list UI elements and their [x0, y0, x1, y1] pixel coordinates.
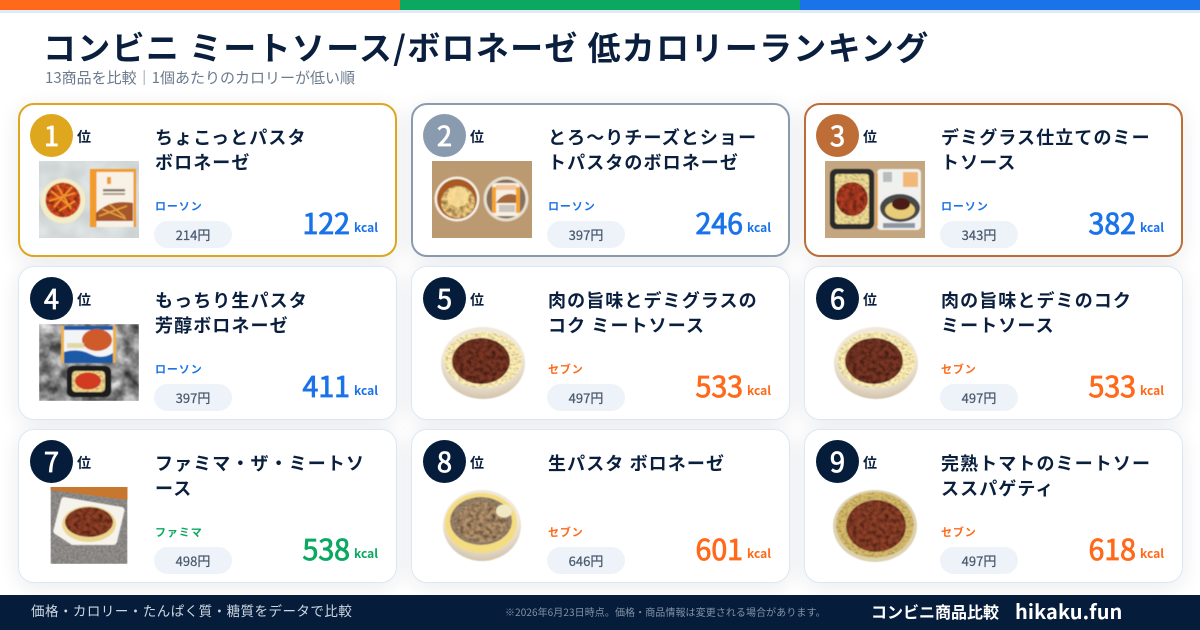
photo: pasta and package: [39, 161, 139, 238]
product name: コク ミートソース: [548, 312, 705, 338]
store: セブン: [941, 361, 977, 377]
card: rank 7: [18, 429, 397, 583]
rank badge 8: 8: [437, 441, 452, 480]
store: セブン: [941, 524, 977, 540]
photo: package and tray on stone: [39, 324, 139, 401]
rank badge 5: [423, 277, 466, 320]
store: ローソン: [941, 198, 989, 214]
price: [547, 547, 625, 574]
price: [547, 384, 625, 411]
card: rank 5: [411, 266, 790, 420]
product name: ミートソース: [941, 312, 1055, 338]
store: セブン: [548, 361, 584, 377]
price: [154, 384, 232, 411]
store: ローソン: [155, 198, 203, 214]
product name: トパスタのボロネーゼ: [548, 149, 739, 175]
price: 343円: [962, 225, 996, 244]
rank suffix: 位: [863, 290, 877, 310]
unit: kcal: [354, 382, 378, 399]
footer tagline: 価格・カロリー・たんぱく質・糖質をデータで比較: [31, 600, 352, 620]
price: 646円: [569, 551, 603, 570]
unit: kcal: [354, 219, 378, 236]
rank suffix: 位: [863, 127, 877, 147]
photo: white tray pasta: [50, 487, 128, 564]
rank badge 9: [816, 440, 859, 483]
product name: 芳醇ボロネーゼ: [155, 312, 289, 338]
price: [547, 221, 625, 248]
footer brand label: コンビニ商品比較: [871, 599, 999, 623]
rank badge 1: [30, 114, 73, 157]
price: 397円: [569, 225, 603, 244]
calories: 382: [1089, 202, 1136, 243]
product name: ボロネーゼ: [155, 149, 250, 175]
product name: [548, 124, 757, 175]
rank suffix: 位: [77, 453, 91, 473]
product name: 肉の旨味とデミグラスの: [548, 287, 758, 313]
price: [940, 221, 1018, 248]
product name: [941, 124, 1151, 175]
rank badge 3: [816, 114, 859, 157]
rank suffix: 位: [470, 453, 484, 473]
rank suffix: 位: [470, 290, 484, 310]
store: ローソン: [155, 361, 203, 377]
rank badge 6: [816, 277, 859, 320]
product name: [548, 287, 758, 338]
calories: 411: [303, 365, 350, 406]
product name: とろ～りチーズとショー: [548, 124, 757, 150]
unit: kcal: [747, 545, 771, 562]
price: [154, 547, 232, 574]
unit: kcal: [1140, 545, 1164, 562]
product name: もっちり生パスタ: [155, 287, 308, 313]
photo: tomato meat sauce plate: [832, 490, 918, 562]
product name: ちょこっとパスタ: [155, 124, 307, 150]
calories: 618: [1089, 528, 1136, 569]
product name: [155, 124, 307, 175]
card: rank 3: [804, 103, 1183, 257]
photo: meat sauce bowl: [440, 326, 526, 400]
rank suffix: 位: [470, 127, 484, 147]
rank badge 9: 9: [830, 441, 845, 480]
card: rank 2: [411, 103, 790, 257]
product name: ース: [155, 475, 192, 501]
price: [940, 384, 1018, 411]
calories: 601: [696, 528, 743, 569]
unit: kcal: [747, 219, 771, 236]
price: [940, 547, 1018, 574]
calories: 122: [303, 202, 350, 243]
product name: デミグラス仕立てのミー: [941, 124, 1151, 150]
calories: 533: [1089, 365, 1136, 406]
product name: [941, 287, 1132, 338]
rank suffix: 位: [77, 127, 91, 147]
rank badge 4: [30, 277, 73, 320]
rank badge 7: [30, 440, 73, 483]
price: 214円: [176, 225, 210, 244]
photo: fresh pasta bowl: [442, 490, 522, 562]
rank badge 6: 6: [830, 278, 845, 317]
card: rank 4: [18, 266, 397, 420]
calories: 246: [696, 202, 743, 243]
top colour bar: [0, 0, 1200, 13]
photo: tray and package: [825, 161, 925, 238]
calories: 538: [303, 528, 350, 569]
product name: 肉の旨味とデミのコク: [941, 287, 1132, 313]
footer bar: [0, 595, 1200, 630]
rank suffix: 位: [863, 453, 877, 473]
unit: kcal: [354, 545, 378, 562]
store: セブン: [548, 524, 584, 540]
price: 397円: [176, 388, 210, 407]
product name: [155, 450, 365, 501]
rank badge 2: [423, 114, 466, 157]
product name: ススパゲティ: [941, 475, 1055, 501]
price: 497円: [962, 388, 996, 407]
subtitle: 13商品を比較｜1個あたりのカロリーが低い順: [45, 67, 355, 88]
price: 497円: [569, 388, 603, 407]
rank badge 4: 4: [44, 278, 59, 317]
title: コンビニ ミートソース/ボロネーゼ 低カロリーランキング: [43, 22, 930, 70]
footer disclaimer: ※2026年6月23日時点。価格・商品情報は変更される場合があります。: [505, 604, 826, 619]
photo: meat sauce bowl: [834, 326, 918, 400]
calories: 533: [696, 365, 743, 406]
store: ファミマ: [155, 524, 203, 540]
unit: kcal: [1140, 382, 1164, 399]
card: rank 8: [411, 429, 790, 583]
product name: [941, 450, 1151, 501]
price: 498円: [176, 551, 210, 570]
price: [154, 221, 232, 248]
photo: cheese gratin pasta: [432, 161, 532, 238]
rank badge 2: 2: [437, 115, 452, 154]
rank badge 3: 3: [830, 115, 845, 154]
product name: 完熟トマトのミートソー: [941, 450, 1151, 476]
card: rank 9: [804, 429, 1183, 583]
footer site name: hikaku.fun: [1015, 596, 1122, 625]
rank badge 8: [423, 440, 466, 483]
card: rank 1: [18, 103, 397, 257]
rank badge 7: 7: [44, 441, 59, 480]
rank badge 5: 5: [437, 278, 452, 317]
rank badge 1: 1: [44, 115, 59, 154]
store: ローソン: [548, 198, 596, 214]
price: 497円: [962, 551, 996, 570]
rank suffix: 位: [77, 290, 91, 310]
unit: kcal: [747, 382, 771, 399]
card: rank 6: [804, 266, 1183, 420]
unit: kcal: [1140, 219, 1164, 236]
product name: [155, 287, 308, 338]
product name: ファミマ・ザ・ミートソ: [155, 450, 365, 476]
product name: トソース: [941, 149, 1016, 175]
product name: 生パスタ ボロネーゼ: [548, 450, 725, 476]
